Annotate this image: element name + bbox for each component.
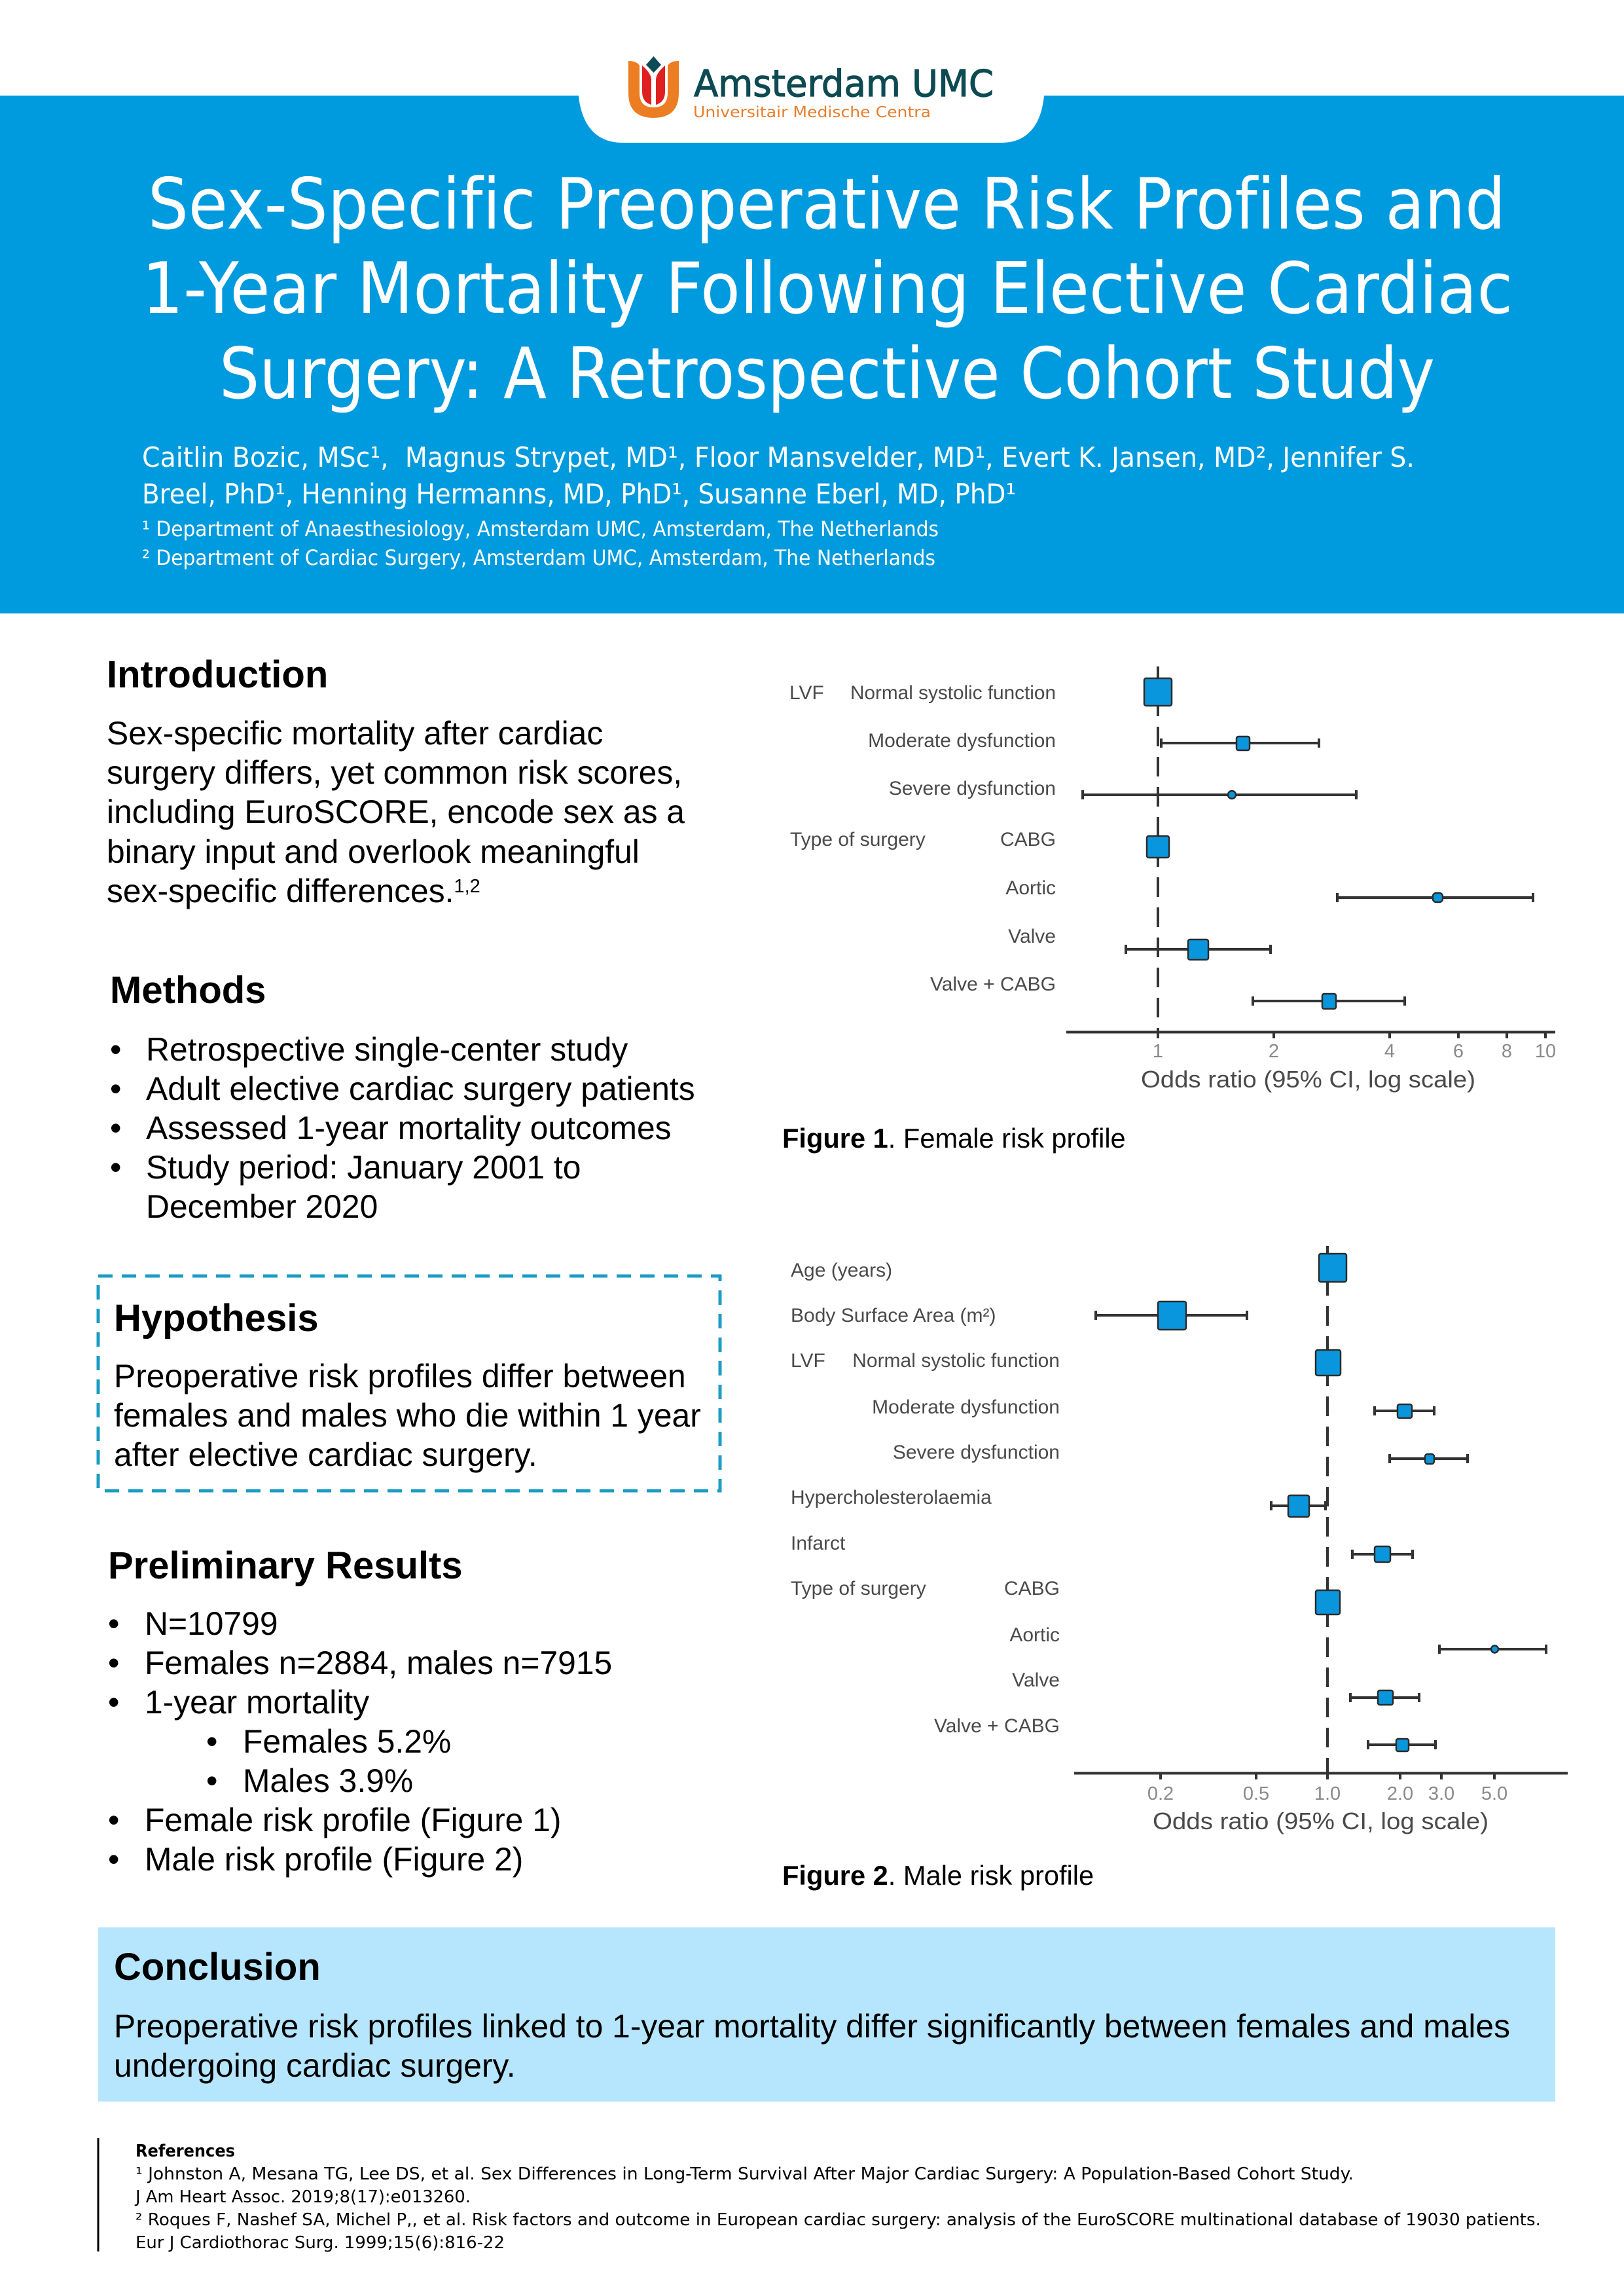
panel: introduction: 1,2 — [454, 876, 480, 897]
row labels: Type of surgery — [790, 829, 926, 850]
authors: Breel, PhD¹, Henning Hermanns, MD, PhD¹, Susanne Eberl, MD, PhD¹ — [142, 478, 1016, 510]
x axis: 6 — [1453, 1041, 1464, 1062]
panel: methods: Study period: January 2001 to — [146, 1149, 581, 1186]
x axis: 10 — [1535, 1041, 1556, 1062]
row labels: Moderate dysfunction — [872, 1396, 1060, 1418]
x axis: 1.0 — [1314, 1783, 1341, 1804]
x axis: 1 — [1153, 1041, 1163, 1062]
row labels: Age (years) — [791, 1260, 892, 1281]
logo: Amsterdam UMC: Amsterdam UMC — [694, 63, 994, 105]
panel: methods: • — [110, 1110, 121, 1146]
x axis: 0.5 — [1243, 1783, 1269, 1804]
x axis: 2 — [1269, 1041, 1279, 1062]
row labels: Severe dysfunction — [893, 1442, 1060, 1463]
row labels: Valve — [1012, 1669, 1060, 1691]
x axis — [1074, 1773, 1568, 1834]
x axis: 8 — [1502, 1041, 1512, 1062]
panel: preliminary results: 1-year mortality — [145, 1684, 369, 1721]
panel: introduction: including EuroSCORE, encode sex as a — [107, 793, 685, 830]
row labels — [791, 1260, 1060, 1737]
references: References — [135, 2141, 235, 2161]
row labels: LVF — [791, 1350, 825, 1372]
panel: introduction: Sex-specific mortality after cardiac — [107, 715, 603, 752]
x axis: Odds ratio (95% CI, log scale) — [1153, 1808, 1489, 1834]
panel: preliminary results: • — [206, 1762, 217, 1799]
panel: methods: • — [110, 1070, 121, 1107]
authors — [142, 441, 1415, 510]
row labels: Normal systolic function — [852, 1350, 1060, 1372]
affiliations — [142, 517, 939, 570]
panel: methods: Assessed 1-year mortality outcomes — [146, 1110, 672, 1146]
references: ¹ Johnston A, Mesana TG, Lee DS, et al. Sex Differences in Long-Term Survival After Major Cardiac Surgery: A Population-Based Cohort Study. — [135, 2164, 1354, 2184]
references: ² Roques F, Nashef SA, Michel P,, et al. Risk factors and outcome in European cardiac surgery: analysis of the EuroSCORE multinational database of 19030 patients. — [135, 2210, 1541, 2230]
row labels: Type of surgery — [791, 1578, 926, 1599]
panel: introduction: binary input and overlook meaningful — [107, 833, 640, 870]
references: Eur J Cardiothorac Surg. 1999;15(6):816-22 — [135, 2233, 505, 2253]
header band — [0, 56, 1624, 613]
caption: figure 1: Figure 1. Female risk profile — [782, 1123, 1126, 1154]
caption: figure 2: Figure 2. Male risk profile — [782, 1860, 1094, 1891]
panel: hypothesis: Hypothesis — [114, 1297, 319, 1339]
panel: hypothesis: Preoperative risk profiles differ between — [114, 1358, 686, 1394]
panel: conclusion: Conclusion — [114, 1946, 321, 1988]
panel: preliminary results: • — [206, 1723, 217, 1760]
row labels: CABG — [1004, 1578, 1060, 1599]
panel: hypothesis: after elective cardiac surgery. — [114, 1436, 537, 1473]
panel: methods: December 2020 — [146, 1188, 378, 1225]
panel: hypothesis — [98, 1276, 720, 1491]
chart: female forest plot — [789, 666, 1556, 1093]
panel: preliminary results: Male risk profile (Figure 2) — [145, 1841, 523, 1878]
title — [142, 164, 1513, 415]
x axis: 2.0 — [1387, 1783, 1413, 1804]
panel: conclusion — [98, 1927, 1555, 2102]
row labels: Hypercholesterolaemia — [791, 1487, 992, 1508]
panel: methods: Retrospective single-center study — [146, 1031, 628, 1068]
panel: introduction — [107, 653, 685, 909]
panel: introduction: sex-specific differences. — [107, 873, 454, 909]
authors: Caitlin Bozic, MSc¹, Magnus Strypet, MD¹, Floor Mansvelder, MD¹, Evert K. Jansen, MD², Jennifer S. — [142, 441, 1415, 473]
panel: hypothesis: females and males who die within 1 year — [114, 1397, 701, 1434]
row labels: CABG — [1000, 829, 1056, 850]
row labels: Aortic — [1005, 877, 1056, 899]
chart: male forest plot — [791, 1246, 1568, 1834]
row labels: Valve — [1008, 926, 1056, 947]
panel: preliminary results: • — [108, 1802, 119, 1838]
panel: preliminary results: • — [108, 1841, 119, 1878]
logo: Amsterdam UMC — [628, 56, 994, 121]
panel: methods: • — [110, 1149, 121, 1186]
confidence intervals and markers — [1083, 678, 1533, 1009]
panel: preliminary results: N=10799 — [145, 1605, 278, 1642]
panel: preliminary results: Males 3.9% — [243, 1762, 413, 1799]
x axis: Odds ratio (95% CI, log scale) — [1141, 1066, 1475, 1093]
row labels: Severe dysfunction — [889, 778, 1056, 799]
panel: preliminary results: Females 5.2% — [243, 1723, 451, 1760]
x axis — [1066, 1032, 1556, 1093]
references: J Am Heart Assoc. 2019;8(17):e013260. — [134, 2187, 471, 2207]
panel: preliminary results — [108, 1544, 612, 1878]
row labels: Infarct — [791, 1533, 846, 1554]
panel: introduction: Introduction — [107, 653, 328, 696]
confidence intervals and markers — [1096, 1254, 1546, 1751]
row labels: Moderate dysfunction — [868, 730, 1056, 752]
panel: preliminary results: • — [108, 1645, 119, 1681]
logo: Amsterdam UMC: Universitair Medische Centra — [693, 104, 931, 121]
panel: methods: Adult elective cardiac surgery patients — [146, 1070, 695, 1107]
title: 1-Year Mortality Following Elective Cardiac — [142, 248, 1513, 330]
panel: conclusion: undergoing cardiac surgery. — [114, 2047, 516, 2084]
x axis: 5.0 — [1481, 1783, 1507, 1804]
title: Sex-Specific Preoperative Risk Profiles and — [148, 164, 1506, 246]
row labels: Aortic — [1009, 1624, 1060, 1646]
row labels: LVF — [789, 682, 824, 704]
x axis: 4 — [1384, 1041, 1395, 1062]
row labels: Normal systolic function — [850, 682, 1056, 704]
x axis: 3.0 — [1428, 1783, 1454, 1804]
panel: introduction: surgery differs, yet common risk scores, — [107, 754, 682, 791]
panel: preliminary results: • — [108, 1605, 119, 1642]
icon: tulip — [628, 56, 679, 118]
affiliations: ² Department of Cardiac Surgery, Amsterdam UMC, Amsterdam, The Netherlands — [142, 545, 935, 570]
x axis: 0.2 — [1147, 1783, 1174, 1804]
panel: conclusion: Preoperative risk profiles linked to 1-year mortality differ significantly between females and males — [114, 2008, 1510, 2045]
panel: preliminary results: • — [108, 1684, 119, 1721]
affiliations: ¹ Department of Anaesthesiology, Amsterdam UMC, Amsterdam, The Netherlands — [142, 517, 939, 541]
panel: preliminary results: Preliminary Results — [108, 1544, 463, 1587]
panel: preliminary results: Female risk profile (Figure 1) — [145, 1802, 561, 1838]
row labels: Body Surface Area (m²) — [791, 1305, 996, 1326]
row labels: Valve + CABG — [930, 974, 1056, 995]
panel: methods: Methods — [110, 969, 266, 1011]
panel: methods — [110, 969, 695, 1225]
row labels: Valve + CABG — [934, 1715, 1060, 1737]
row labels — [789, 682, 1056, 995]
references — [98, 2138, 1541, 2253]
title: Surgery: A Retrospective Cohort Study — [219, 333, 1435, 415]
panel: methods: • — [110, 1031, 121, 1068]
panel: preliminary results: Females n=2884, males n=7915 — [145, 1645, 612, 1681]
